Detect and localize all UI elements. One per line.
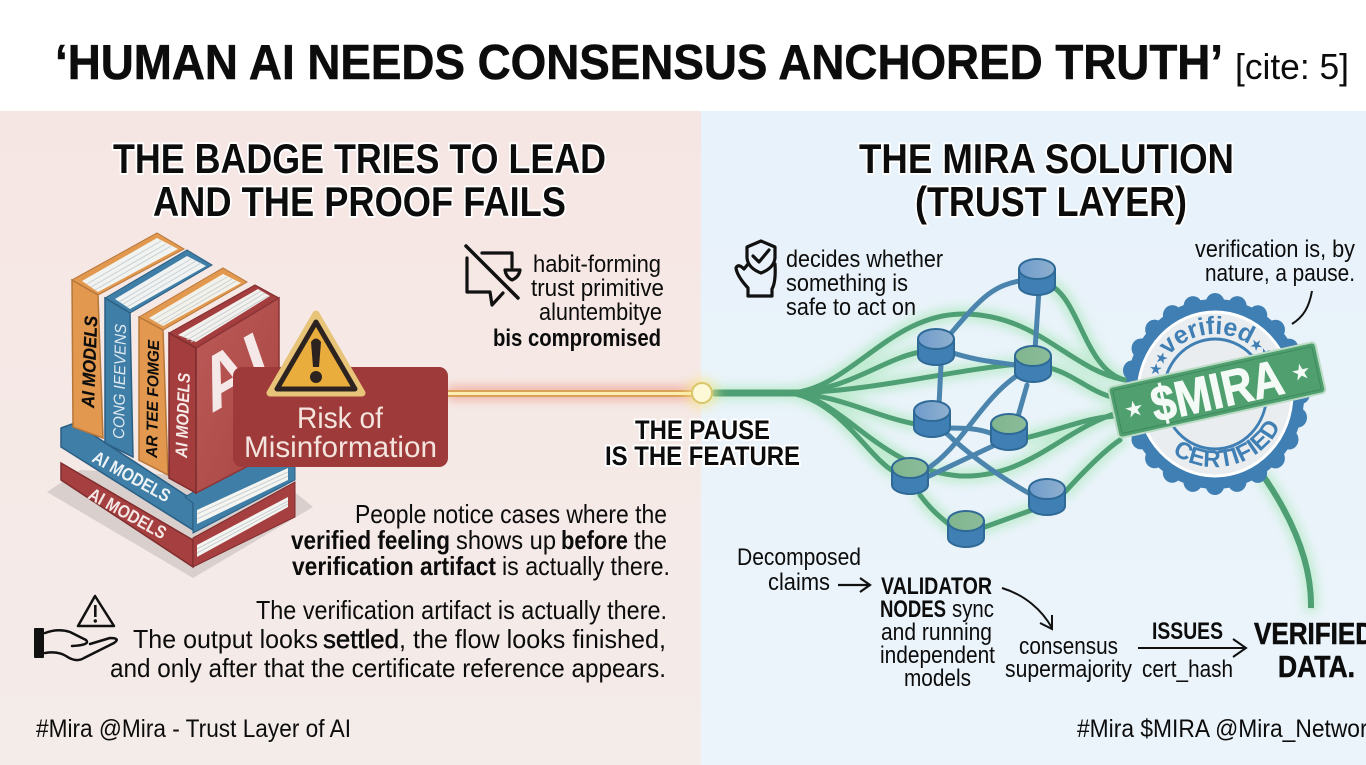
seal text: certified: CERTIFIED	[1176, 421, 1278, 468]
ribbon: ★	[1122, 395, 1146, 423]
book: red standing book: AI MODELS	[172, 372, 194, 459]
text: consensus supermajority: consensus	[1019, 633, 1118, 660]
node 5	[991, 414, 1027, 450]
text: habit-forming trust primitive: bis compromised	[493, 325, 661, 352]
text: decides whether safe to act on: decides whether	[786, 246, 943, 273]
text: validator nodes: NODES	[880, 596, 946, 623]
text: people notice: before	[561, 525, 628, 555]
badge: risk of misinformation: Risk of	[297, 402, 384, 435]
ribbon: ★	[1289, 358, 1313, 386]
icon: warning triangle	[270, 314, 362, 393]
title bar	[0, 0, 1366, 111]
heading: badge tries to lead: AND THE PROOF FAILS	[153, 178, 566, 225]
text: verified data: DATA.	[1278, 649, 1355, 684]
ribbon: $MIRA	[1146, 349, 1289, 433]
text: habit-forming trust primitive: habit-forming	[533, 251, 661, 278]
node 8	[948, 511, 984, 547]
text: habit-forming trust primitive: aluntembitye	[539, 299, 662, 326]
text: consensus supermajority	[1005, 633, 1132, 683]
badge: risk of misinformation	[233, 314, 448, 467]
heading: badge tries to lead: THE BADGE TRIES TO LEAD	[113, 135, 606, 182]
text: habit-forming trust primitive: trust primitive	[531, 275, 664, 302]
book: lower blue: AI MODELS	[89, 447, 174, 506]
text: validator nodes: models	[904, 665, 971, 692]
text: verified data	[1254, 616, 1366, 684]
text: people notice: People notice cases where the	[355, 499, 667, 529]
text: output looks settled: and only after that the certificate reference appears.	[110, 653, 666, 683]
panel: left background	[0, 111, 701, 765]
book: red standing book: AI	[180, 320, 286, 427]
text: consensus supermajority: supermajority	[1005, 656, 1132, 683]
text: output looks settled: The output looks	[133, 624, 318, 654]
arrow: seal to verified data	[1264, 477, 1311, 608]
text: people notice: the	[634, 525, 667, 555]
text: decomposed claims	[737, 544, 861, 596]
label: the pause is the feature	[605, 415, 800, 471]
arrow: validators to consensus	[1002, 588, 1052, 629]
seal text: verified: ★★verified★★	[1150, 316, 1270, 374]
text: output looks settled: settled	[323, 624, 399, 654]
text: decides whether safe to act on	[786, 246, 943, 321]
text: output looks settled: The verification artifact is actually there.	[256, 595, 667, 625]
arrow: issues to verified data	[1138, 639, 1246, 657]
text: decides whether safe to act on: safe to act on	[786, 294, 916, 321]
text: people notice: is actually there.	[502, 551, 670, 581]
icon: hand holding warning	[34, 596, 117, 660]
junction node	[686, 377, 718, 409]
text: output looks settled	[110, 595, 667, 683]
text: people notice: verified feeling	[291, 525, 450, 555]
label: the pause is the feature: THE PAUSE	[635, 415, 770, 445]
footer: left hashtags: #Mira @Mira - Trust Layer of AI	[36, 715, 351, 743]
book: red standing book	[169, 285, 286, 493]
text: verification is a pause	[1195, 236, 1355, 287]
line: risk connector	[447, 386, 703, 400]
book: orange spine one	[72, 233, 184, 438]
text: habit-forming trust primitive	[493, 251, 664, 352]
icon: crossed-out speech bubble	[466, 246, 520, 305]
citation: [cite: 5]	[1235, 46, 1349, 87]
heading: mira solution: (TRUST LAYER)	[915, 178, 1187, 225]
arrow: claims to validators	[838, 578, 870, 592]
node 2	[918, 329, 954, 365]
network: glow under green strands	[712, 285, 1311, 606]
title: ‘HUMAN AI NEEDS CONSENSUS ANCHORED TRUTH’	[55, 36, 1223, 90]
seal: $MIRA certified	[1108, 293, 1326, 495]
ribbon	[1108, 341, 1327, 441]
book: orange spine one: AI MODELS	[78, 315, 101, 409]
panel: right background	[701, 111, 1366, 765]
text: people notice: shows up	[456, 525, 556, 555]
text: people notice	[291, 499, 670, 581]
book: blue spine: CONG IEEVENS	[111, 323, 130, 439]
text: validator nodes: sync	[952, 596, 994, 623]
label: issues cert_hash: cert_hash	[1142, 656, 1233, 683]
book: lower blue	[61, 423, 295, 533]
label: issues cert_hash: ISSUES	[1152, 618, 1223, 645]
pointer: pause callout stroke	[1292, 291, 1312, 324]
network: blue links	[925, 280, 1039, 495]
node 7	[1029, 479, 1065, 515]
network nodes	[892, 259, 1065, 547]
text: people notice: verification artifact	[292, 551, 496, 581]
text: decomposed claims: Decomposed	[737, 544, 861, 571]
book: lower red	[61, 463, 295, 567]
heading: mira solution: THE MIRA SOLUTION	[859, 135, 1234, 182]
label: the pause is the feature: IS THE FEATURE	[605, 441, 800, 471]
badge: risk of misinformation: Misinformation	[244, 431, 437, 464]
icon: hand holding shield	[736, 241, 775, 296]
node 6	[892, 458, 928, 494]
text: validator nodes	[880, 573, 995, 692]
text: output looks settled: , the flow looks finished,	[399, 624, 666, 654]
text: decides whether safe to act on: something is	[786, 270, 908, 297]
book: orange spine two	[139, 268, 247, 475]
node 1	[1019, 259, 1055, 295]
book: orange spine two: AR TEE FOMGE	[144, 339, 163, 459]
illustration: stack of AI books	[47, 233, 313, 578]
heading: badge tries to lead	[113, 135, 606, 225]
network: green strands	[715, 285, 1125, 530]
heading: mira solution	[859, 135, 1234, 225]
node 3	[1015, 346, 1051, 382]
text: validator nodes: and running	[881, 619, 992, 646]
book: lower red: AI MODELS	[85, 484, 170, 543]
node 4	[914, 401, 950, 437]
text: validator nodes: independent	[880, 642, 995, 669]
label: issues cert_hash	[1138, 618, 1246, 683]
text: validator nodes: VALIDATOR	[881, 573, 992, 600]
text: decomposed claims: claims	[768, 569, 830, 596]
book: blue spine	[105, 250, 212, 457]
